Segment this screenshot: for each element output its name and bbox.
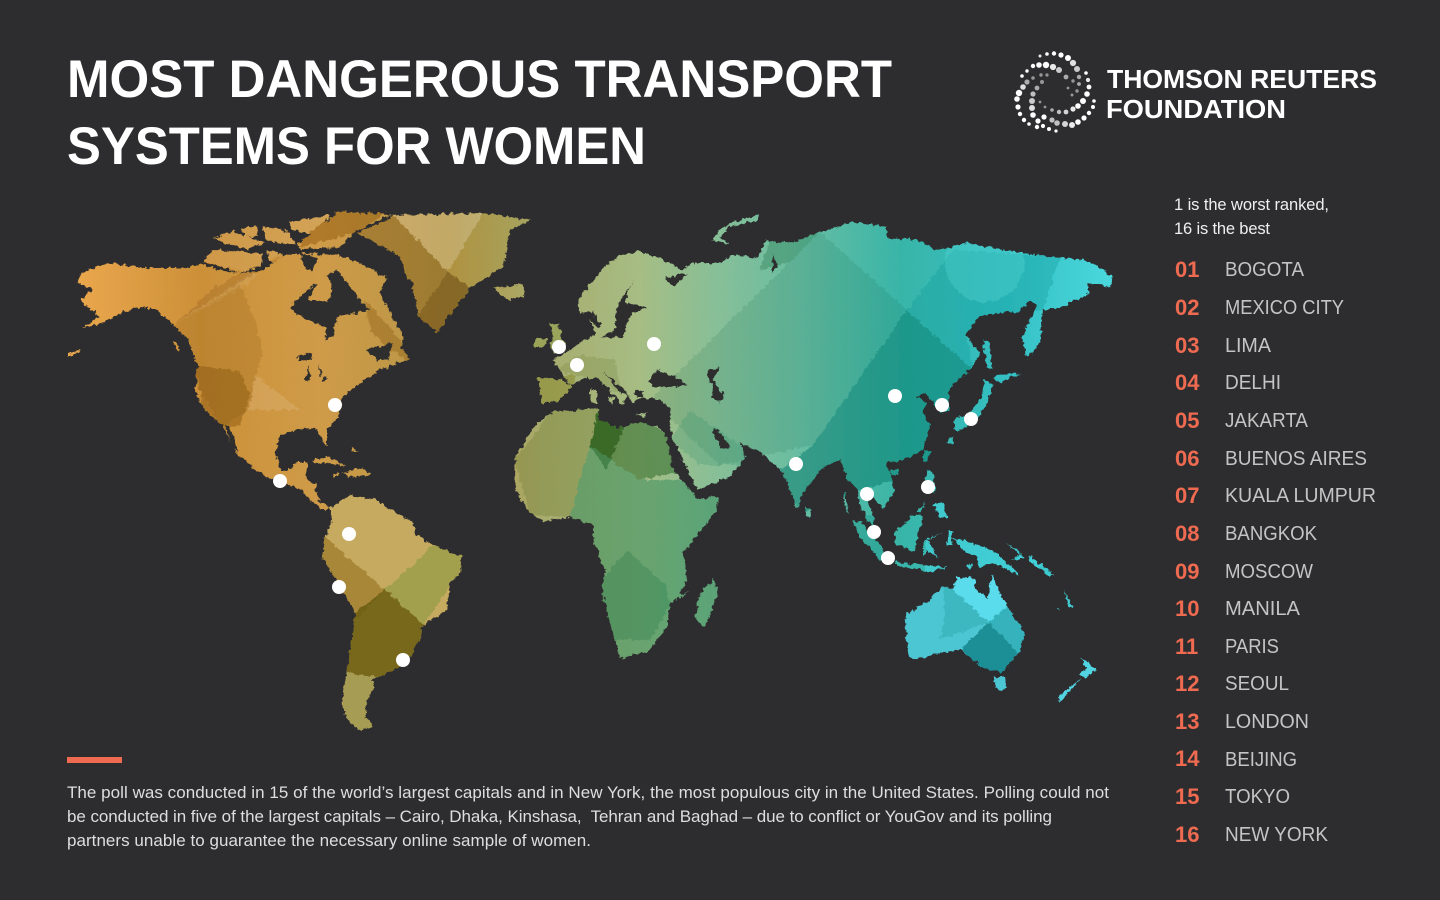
logo: Thomson Reuters Foundation — [1014, 51, 1377, 133]
ranked city list: NEW YORK — [1225, 824, 1329, 846]
logo wordmark — [1106, 64, 1377, 124]
ranked city list: BUENOS AIRES — [1225, 448, 1367, 470]
ranked city list: LONDON — [1225, 711, 1309, 733]
ranked city list: 03 — [1175, 333, 1199, 358]
title — [67, 50, 892, 176]
city markers — [273, 337, 978, 667]
ranked city list: TOKYO — [1225, 786, 1290, 808]
title: MOST DANGEROUS TRANSPORT — [67, 50, 892, 109]
ranked city list: 08 — [1175, 521, 1199, 546]
ranking key: 1 is the worst ranked, — [1174, 196, 1329, 214]
ranked city list: 01 — [1175, 257, 1199, 282]
ranked city list: 10 — [1175, 596, 1199, 621]
ranked city list: DELHI — [1225, 372, 1281, 394]
ranked city list: 09 — [1175, 559, 1199, 584]
Eurasian inland seas — [590, 253, 778, 449]
ranked city list: MANILA — [1225, 598, 1301, 620]
ranked city list: 06 — [1175, 446, 1199, 471]
ranked city list: KUALA LUMPUR — [1225, 485, 1376, 507]
ranked city list: MOSCOW — [1225, 561, 1313, 583]
ranked city list: 02 — [1175, 295, 1199, 320]
ranked city list: 04 — [1175, 370, 1200, 395]
ranked city list: MEXICO CITY — [1225, 297, 1344, 319]
ranked city list: JAKARTA — [1225, 410, 1309, 432]
ranked city list — [1175, 257, 1376, 847]
logo wordmark: FOUNDATION — [1106, 94, 1286, 124]
methodology note — [67, 783, 1109, 850]
logo wordmark: THOMSON REUTERS — [1107, 64, 1377, 94]
ranking key: 16 is the best — [1174, 220, 1270, 238]
ranked city list: 14 — [1175, 746, 1200, 771]
ranked city list: 11 — [1175, 634, 1198, 659]
ranked city list: LIMA — [1225, 335, 1272, 357]
map: Australia and New Zealand — [900, 570, 1100, 705]
icon: dotted spiral — [1014, 51, 1096, 133]
North America inland waters — [225, 253, 393, 452]
ranked city list: 15 — [1175, 784, 1199, 809]
world map — [60, 205, 1120, 735]
ranked city list: 13 — [1175, 709, 1199, 734]
ranked city list: BEIJING — [1225, 749, 1297, 771]
ranking key — [1174, 196, 1329, 238]
title: SYSTEMS FOR WOMEN — [67, 117, 646, 176]
map: Africa — [510, 405, 725, 665]
methodology note: be conducted in five of the largest capitals – Cairo, Dhaka, Kinshasa, Tehran and Baghad – due to conflict or YouGov and its polling — [67, 807, 1052, 826]
ranked city list: PARIS — [1225, 636, 1279, 658]
map: North America and Greenland — [60, 205, 535, 515]
ranked city list: BANGKOK — [1225, 523, 1318, 545]
methodology note: partners unable to guarantee the necessary online sample of women. — [67, 831, 591, 850]
ranked city list: SEOUL — [1225, 673, 1289, 695]
ranked city list: 05 — [1175, 408, 1199, 433]
ranked city list: 12 — [1175, 671, 1199, 696]
accent bar — [67, 757, 122, 763]
methodology note: The poll was conducted in 15 of the world’s largest capitals and in New York, the most populous city in the United States. Polling could not — [67, 783, 1109, 802]
map: Europe and Asia — [530, 210, 1120, 610]
ranked city list: 07 — [1175, 483, 1199, 508]
ranked city list: BOGOTA — [1225, 259, 1305, 281]
map: South America — [322, 494, 463, 731]
ranked city list: 16 — [1175, 822, 1199, 847]
